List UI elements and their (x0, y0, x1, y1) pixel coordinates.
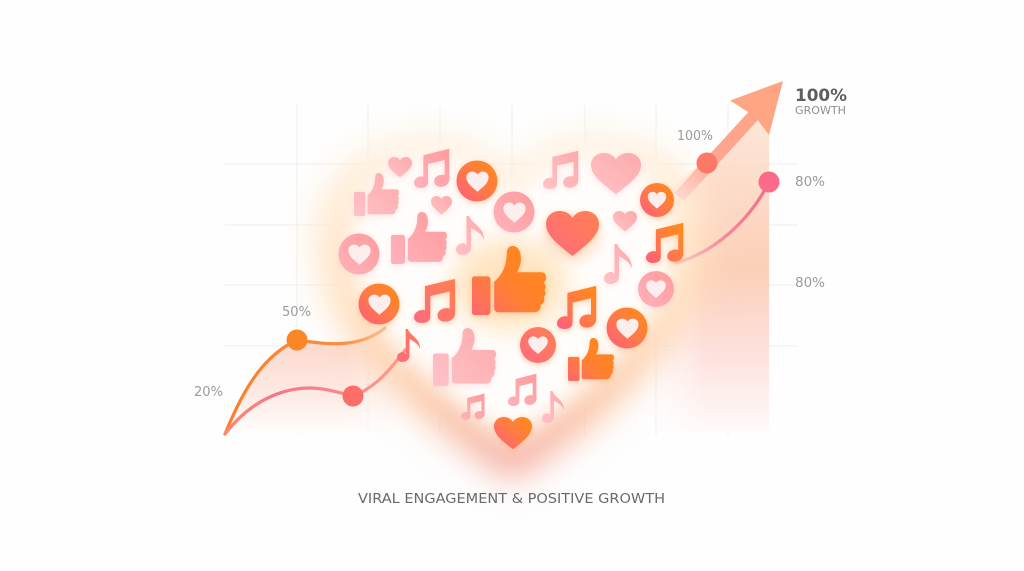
icon: light pink single note (542, 391, 564, 423)
area fill: left chart (232, 340, 382, 434)
icon: single note on line (397, 329, 420, 362)
icon: pink heart badge (638, 271, 674, 307)
line: right pink curve (676, 182, 769, 263)
icon: pink single note (456, 216, 484, 255)
label: 80% upper: 80% (795, 174, 825, 190)
label: 100%: 100% (677, 128, 713, 144)
icon: orange music note (557, 286, 596, 329)
icon: orange thumbs up (568, 338, 614, 381)
icon: small pink heart (613, 211, 637, 232)
caption: VIRAL ENGAGEMENT & POSITIVE GROWTH (358, 491, 665, 507)
icon: pink heart badge (338, 234, 380, 274)
label: 100% growth (795, 86, 847, 117)
icon: red-orange heart badge (358, 284, 400, 324)
icon: pink music note (461, 394, 485, 420)
icon: red heart badge (520, 327, 556, 363)
icon: orange music note (646, 223, 683, 263)
icon: big pink heart (591, 153, 641, 194)
icon: pink music note (414, 149, 449, 188)
icon: main orange thumbs up (472, 246, 546, 315)
chart points (286, 152, 780, 406)
label: 100% growth: GROWTH (795, 105, 846, 117)
icon: small pink heart (388, 157, 412, 178)
icon: orange heart badge (606, 308, 648, 348)
label: 100% growth: 100% (795, 86, 847, 106)
icon: orange heart badge (456, 160, 498, 202)
icon: pink thumbs up (391, 212, 447, 264)
area fill: right chart (668, 120, 769, 432)
line: orange growth curve (225, 328, 385, 434)
icon: pink thumbs up (433, 328, 496, 386)
heart glow (318, 134, 708, 480)
icon: small pink heart (431, 196, 452, 215)
label: 80% lower: 80% (795, 275, 825, 291)
icon: pink single note (604, 244, 632, 284)
label: 50%: 50% (282, 304, 311, 320)
icon: red music note (414, 279, 455, 323)
label: 20%: 20% (194, 384, 223, 400)
icon: pink heart badge (494, 192, 534, 232)
line: pink growth curve (225, 350, 405, 434)
icon: pink music note (508, 374, 536, 406)
icon: pink music note (543, 151, 578, 189)
icon: bottom heart (494, 417, 532, 449)
icon: red-orange heart (546, 211, 599, 256)
icon cluster in heart shape (338, 149, 683, 449)
arrow: 100% growth (679, 81, 783, 197)
chart grid (225, 105, 798, 435)
icon: pink thumbs up (354, 173, 399, 216)
icon: orange heart badge (640, 183, 674, 217)
